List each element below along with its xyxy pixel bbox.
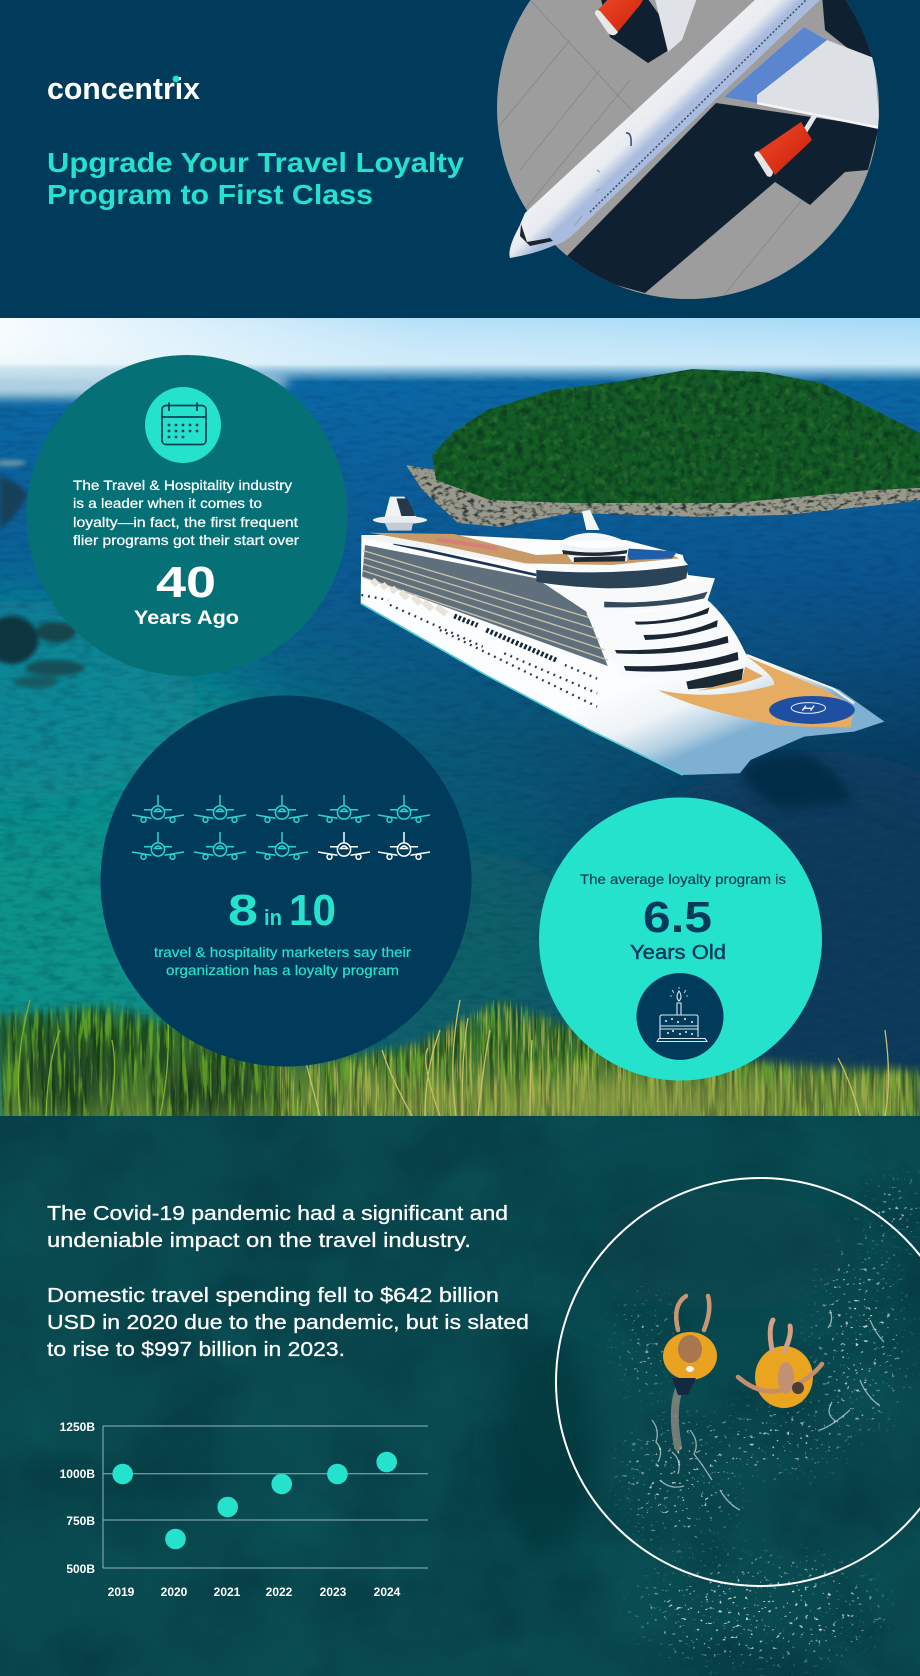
- y axis labels: 500B: [66, 1562, 95, 1576]
- text block: covid impact: undeniable impact on the travel industry.: [47, 1230, 471, 1252]
- circle panel: average program age: [539, 798, 822, 1080]
- text: travel and hospitality industry: [73, 477, 299, 548]
- stat: 8 in 10: in: [264, 905, 282, 930]
- glass band: [526, 560, 688, 566]
- text: marketers: [154, 944, 411, 978]
- y axis labels: 750B: [66, 1514, 95, 1528]
- stat: 8 in 10: 10: [289, 886, 336, 935]
- stat: 8 in 10: 8: [228, 886, 258, 935]
- second tier: [713, 578, 715, 583]
- title: Upgrade Your Travel Loyalty: [47, 147, 464, 178]
- text block: covid impact: [47, 1203, 529, 1361]
- x axis labels: 2024: [374, 1585, 401, 1599]
- text: travel and hospitality industry: The Travel & Hospitality industry: [73, 477, 292, 493]
- cruise ship: [361, 497, 884, 775]
- front superstructure: [586, 602, 746, 653]
- rocks at left shore: [0, 460, 85, 688]
- engine: lower red: [804, 114, 817, 132]
- sky: [0, 318, 920, 398]
- x axis labels: 2023: [320, 1585, 347, 1599]
- icon: calendar: [145, 387, 221, 463]
- chart: domestic travel spending dot plot: [60, 1420, 428, 1599]
- balcony decks: [362, 545, 608, 666]
- x axis labels: [108, 1585, 401, 1599]
- x axis labels: 2022: [266, 1585, 293, 1599]
- stat label: years ago: Years Ago: [134, 608, 239, 629]
- bow deck: [658, 657, 854, 727]
- data points: [112, 1452, 397, 1549]
- stat label: years old: Years Old: [630, 942, 726, 964]
- stat: 40: 40: [156, 558, 216, 607]
- text: travel and hospitality industry: loyalty—in fact, the first frequent: [73, 514, 298, 530]
- header panel: [48, 0, 879, 299]
- y axis labels: 1000B: [60, 1467, 95, 1481]
- island: [406, 369, 920, 527]
- text block: covid impact: Domestic travel spending fell to $642 billion: [47, 1285, 499, 1307]
- text: marketers: organization has a loyalty program: [166, 962, 399, 978]
- ship shadow: [740, 752, 850, 808]
- y axis labels: [60, 1420, 95, 1576]
- helipad: [769, 696, 855, 724]
- x axis labels: 2020: [161, 1585, 188, 1599]
- photo: swimmers on orange rings: [663, 1296, 822, 1447]
- text: marketers: travel & hospitality marketers say their: [154, 944, 411, 960]
- ring outline: [556, 1178, 920, 1586]
- lower panel: water background: [0, 1116, 920, 1676]
- engine: upper red: [596, 0, 646, 34]
- text: average loyalty program: The average loyalty program is: [580, 871, 786, 887]
- right wing: [724, 27, 880, 128]
- x axis labels: 2019: [108, 1585, 135, 1599]
- y axis labels: 1250B: [60, 1420, 95, 1434]
- lifeboats: [372, 580, 446, 614]
- icon: birthday cake: [636, 973, 724, 1060]
- photo: airplane seen from above in circle: [490, 0, 890, 310]
- text: travel and hospitality industry: flier programs got their start over: [73, 532, 299, 548]
- circle panel: 40 years ago: [26, 355, 348, 676]
- stat: 6.5: 6.5: [643, 893, 712, 942]
- fuselage: [509, 0, 822, 258]
- text: travel and hospitality industry: is a leader when it comes to: [73, 495, 262, 511]
- stern tower: [385, 497, 417, 517]
- sea: [0, 318, 920, 1150]
- grass foreground: [0, 985, 920, 1122]
- photo panel: cruise ship and island: [0, 318, 920, 1150]
- water splashes: [500, 1160, 920, 1676]
- text block: covid impact: USD in 2020 due to the pandemic, but is slated: [47, 1312, 529, 1334]
- upper wing: [654, 0, 698, 52]
- text block: covid impact: to rise to $997 billion in 2023.: [47, 1339, 345, 1361]
- text block: covid impact: The Covid-19 pandemic had a significant and: [47, 1203, 508, 1225]
- top deck: [369, 533, 679, 565]
- icon row: ten airplanes, eight highlighted: [132, 795, 430, 859]
- title: [47, 147, 464, 210]
- logo: concentrix: concentrix: [47, 71, 201, 106]
- stat: 8 in 10: [228, 886, 336, 935]
- funnel and dome: [582, 510, 600, 530]
- x axis labels: 2021: [214, 1585, 241, 1599]
- title: Program to First Class: [47, 179, 373, 210]
- hull: [361, 535, 884, 775]
- hull windows: [454, 616, 556, 660]
- circle panel: 8 in 10: [100, 696, 472, 1066]
